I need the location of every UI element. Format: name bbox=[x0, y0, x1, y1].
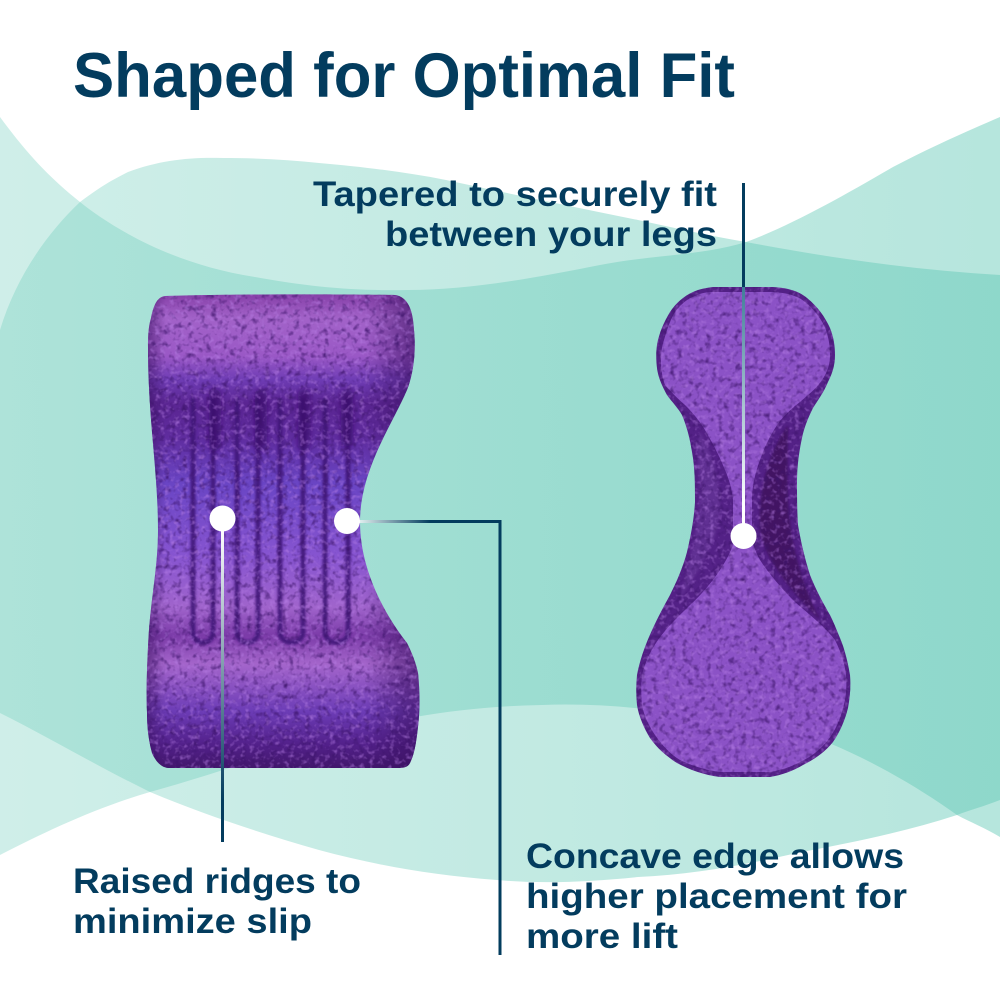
callout text: ridges: minimize slip bbox=[73, 902, 312, 941]
callout text: tapered: between your legs bbox=[385, 215, 717, 254]
callout line: ridges bbox=[221, 518, 224, 842]
callout dot: ridges bbox=[210, 506, 236, 532]
callout dot: tapered bbox=[730, 523, 756, 549]
background waves bbox=[0, 117, 1000, 882]
ridge top highlights bbox=[199, 382, 341, 388]
callout text: ridges bbox=[73, 862, 361, 941]
callout text: concave edge: Concave edge allows bbox=[526, 837, 904, 876]
dark groove tops bbox=[215, 395, 347, 445]
callout text: concave edge: higher placement for bbox=[526, 877, 907, 916]
product: end view pad bbox=[636, 287, 850, 777]
ridges bbox=[193, 385, 348, 642]
callout text: tapered bbox=[313, 175, 717, 254]
callout text: tapered: Tapered to securely fit bbox=[313, 175, 717, 214]
end faces bbox=[641, 292, 846, 772]
callout line: tapered bbox=[742, 183, 745, 536]
side edge shading bbox=[147, 294, 420, 768]
right side shadow bbox=[760, 425, 820, 620]
left side shadow bbox=[680, 432, 720, 598]
product: side view pad with ridges bbox=[147, 294, 420, 768]
callout text: concave edge bbox=[526, 837, 907, 956]
callout line: concave edge bbox=[347, 522, 500, 955]
callout text: concave edge: more lift bbox=[526, 917, 678, 956]
callout text: ridges: Raised ridges to bbox=[73, 862, 361, 901]
callout dot: concave edge bbox=[334, 508, 360, 534]
title: Shaped for Optimal Fit bbox=[73, 41, 735, 111]
